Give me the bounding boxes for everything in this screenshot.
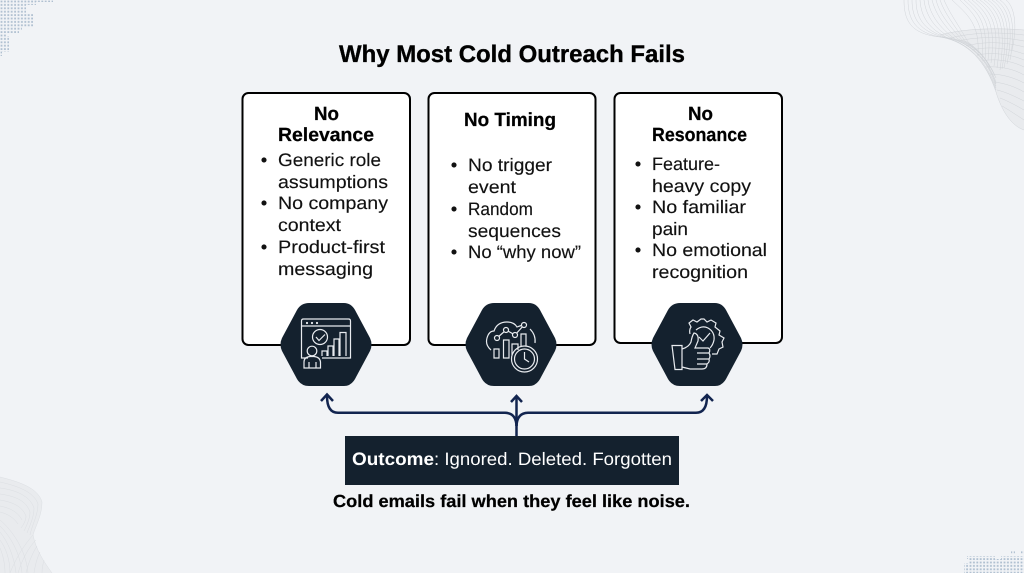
bullet list: no resonance	[636, 154, 767, 282]
bullet list: no relevance: No company	[278, 193, 388, 213]
bullet list: no resonance: heavy copy	[652, 176, 751, 196]
bullet list: no timing: No “why now”	[468, 242, 581, 262]
panel: no resonance	[614, 93, 782, 343]
decoration: bottom-left wave lines	[0, 477, 52, 573]
heading: no relevance: Relevance	[278, 125, 374, 146]
bullet list: no timing	[452, 155, 581, 262]
title: Why Most Cold Outreach Fails	[339, 41, 685, 68]
heading: no relevance	[278, 104, 374, 146]
icon: thumbs up with gear in hexagon	[652, 303, 742, 386]
icon: dashboard with person in hexagon	[280, 303, 372, 386]
bullet list: no resonance: No familiar	[652, 197, 746, 217]
panel: no relevance	[242, 93, 410, 345]
decoration: top-right wave lines	[904, 0, 1024, 130]
outcome text: Outcome	[352, 449, 434, 469]
takeaway caption: Cold emails fail when they feel like noise.	[333, 491, 690, 511]
arrows: outcome branching to three causes	[321, 394, 713, 436]
panel: no timing	[428, 93, 596, 345]
outcome box	[345, 436, 679, 485]
heading: no resonance	[652, 104, 747, 146]
decoration: top-left dot pattern	[0, 0, 53, 56]
heading: no resonance: Resonance	[652, 125, 747, 146]
bullet list: no relevance: Product-first	[278, 237, 385, 257]
bullet list: no relevance: Generic role	[278, 150, 381, 170]
bullet list: no relevance: messaging	[278, 259, 373, 279]
bullet list: no resonance: recognition	[652, 262, 748, 282]
bullet list: no relevance	[262, 150, 388, 279]
bullet list: no resonance: pain	[652, 219, 688, 239]
bullet list: no timing: Random	[468, 199, 533, 219]
icon: cloud analytics with clock in hexagon	[466, 303, 556, 386]
heading: no resonance: No	[688, 104, 713, 125]
bullet list: no timing: event	[468, 177, 516, 197]
outcome text: : Ignored. Deleted. Forgotten	[434, 449, 672, 469]
bullet list: no timing: No trigger	[468, 155, 552, 175]
heading: no relevance: No	[314, 104, 339, 125]
bullet list: no timing: sequences	[468, 221, 561, 241]
bullet list: no relevance: assumptions	[278, 172, 388, 192]
heading: no timing: No Timing	[464, 110, 556, 131]
bullet list: no resonance: Feature-	[652, 154, 720, 174]
bullet list: no relevance: context	[278, 215, 341, 235]
decoration: bottom-right dot pattern	[964, 550, 1024, 573]
bullet list: no resonance: No emotional	[652, 240, 767, 260]
